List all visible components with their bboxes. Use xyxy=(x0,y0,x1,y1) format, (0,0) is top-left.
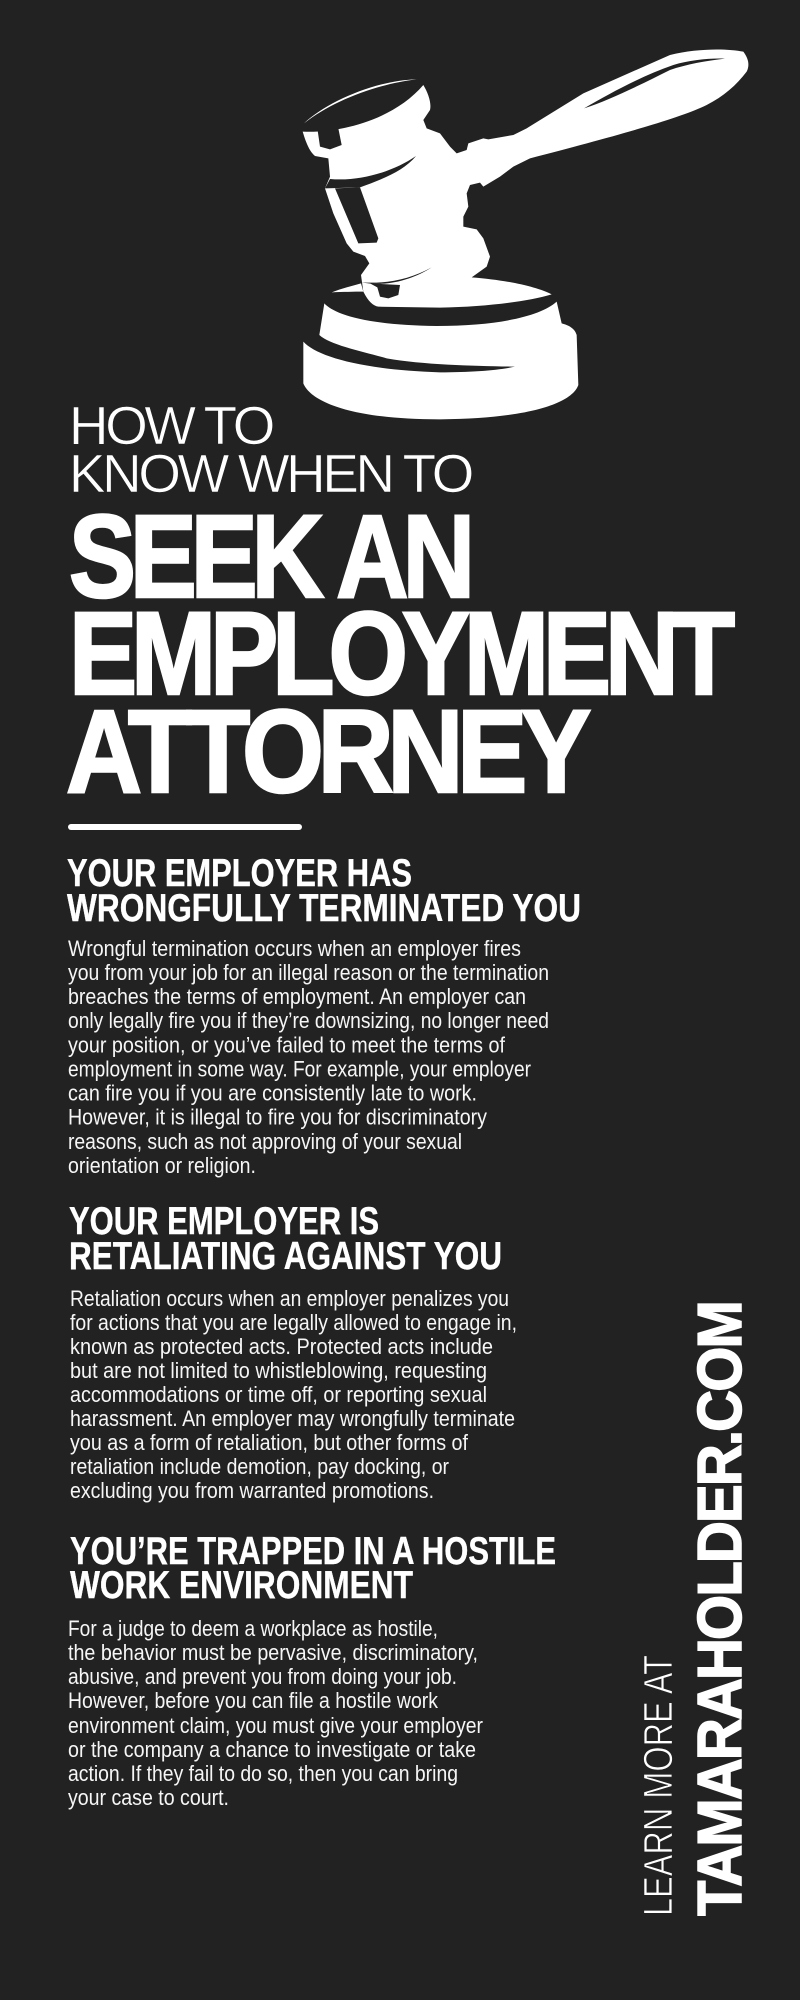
heading: YOUR EMPLOYER HAS xyxy=(67,852,412,895)
title: SEEK AN xyxy=(69,491,469,623)
section: hostile work environment xyxy=(68,1530,556,1810)
body text: orientation or religion. xyxy=(68,1153,256,1178)
block highlight xyxy=(332,283,363,292)
section: wrongful termination xyxy=(67,852,581,1178)
body text: environment claim, you must give your employer xyxy=(68,1713,483,1738)
body text: reasons, such as not approving of your sexual xyxy=(68,1129,462,1154)
heading: WRONGFULLY TERMINATED YOU xyxy=(67,887,581,930)
body text: you as a form of retaliation, but other forms of xyxy=(70,1430,469,1455)
body text: the behavior must be pervasive, discriminatory, xyxy=(68,1640,478,1665)
body text: However, before you can file a hostile work xyxy=(68,1688,439,1713)
body text: for actions that you are legally allowed to engage in, xyxy=(70,1310,517,1335)
body text: For a judge to deem a workplace as hostile, xyxy=(68,1616,438,1641)
body text: your position, or you’ve failed to meet the terms of xyxy=(68,1032,506,1058)
heading: YOUR EMPLOYER IS xyxy=(69,1200,379,1243)
body text: retaliation include demotion, pay docking, or xyxy=(70,1454,449,1479)
gavel details xyxy=(317,59,725,298)
heading xyxy=(69,1200,502,1278)
title: HOW TO xyxy=(69,396,273,456)
body text xyxy=(68,1616,483,1810)
icon: gavel striking block xyxy=(303,49,748,419)
body text: abusive, and prevent you from doing your job. xyxy=(68,1664,457,1689)
sound block base xyxy=(303,302,578,419)
title: KNOW WHEN TO xyxy=(69,444,472,504)
body text: can fire you if you are consistently late to work. xyxy=(68,1080,477,1106)
title xyxy=(66,396,734,818)
body text xyxy=(68,936,549,1178)
body text: breaches the terms of employment. An employer can xyxy=(68,984,526,1009)
website url: TAMARAHOLDER.COM xyxy=(686,1302,755,1916)
body text: known as protected acts. Protected acts include xyxy=(70,1334,493,1359)
gavel head highlight xyxy=(304,79,417,123)
body text: However, it is illegal to fire you for discriminatory xyxy=(68,1105,488,1130)
heading xyxy=(67,852,581,930)
body text xyxy=(70,1286,517,1503)
body text: harassment. An employer may wrongfully terminate xyxy=(70,1406,515,1431)
body text: you from your job for an illegal reason or the termination xyxy=(68,960,549,985)
body text: your case to court. xyxy=(68,1785,229,1810)
vertical call to action xyxy=(635,1302,755,1916)
body text: action. If they fail to do so, then you can bring xyxy=(68,1761,458,1786)
body text: excluding you from warranted promotions. xyxy=(70,1478,434,1503)
body text: accommodations or time off, or reporting sexual xyxy=(70,1382,487,1407)
heading: RETALIATING AGAINST YOU xyxy=(69,1235,502,1278)
body text: only legally fire you if they’re downsizing, no longer need xyxy=(68,1008,549,1033)
title: ATTORNEY xyxy=(66,686,590,818)
learn more label: LEARN MORE AT xyxy=(635,1655,681,1916)
heading: YOU’RE TRAPPED IN A HOSTILE xyxy=(70,1530,556,1573)
heading xyxy=(70,1530,556,1607)
body text: or the company a chance to investigate or take xyxy=(68,1737,476,1762)
heading: WORK ENVIRONMENT xyxy=(70,1564,413,1607)
body text: employment in some way. For example, your employer xyxy=(68,1056,531,1082)
title divider xyxy=(68,824,302,830)
section: retaliation xyxy=(69,1200,517,1503)
body text: Wrongful termination occurs when an employer fires xyxy=(68,936,521,961)
gavel head and handle xyxy=(303,49,748,308)
body text: Retaliation occurs when an employer penalizes you xyxy=(70,1286,509,1311)
body text: but are not limited to whistleblowing, requesting xyxy=(70,1358,487,1383)
